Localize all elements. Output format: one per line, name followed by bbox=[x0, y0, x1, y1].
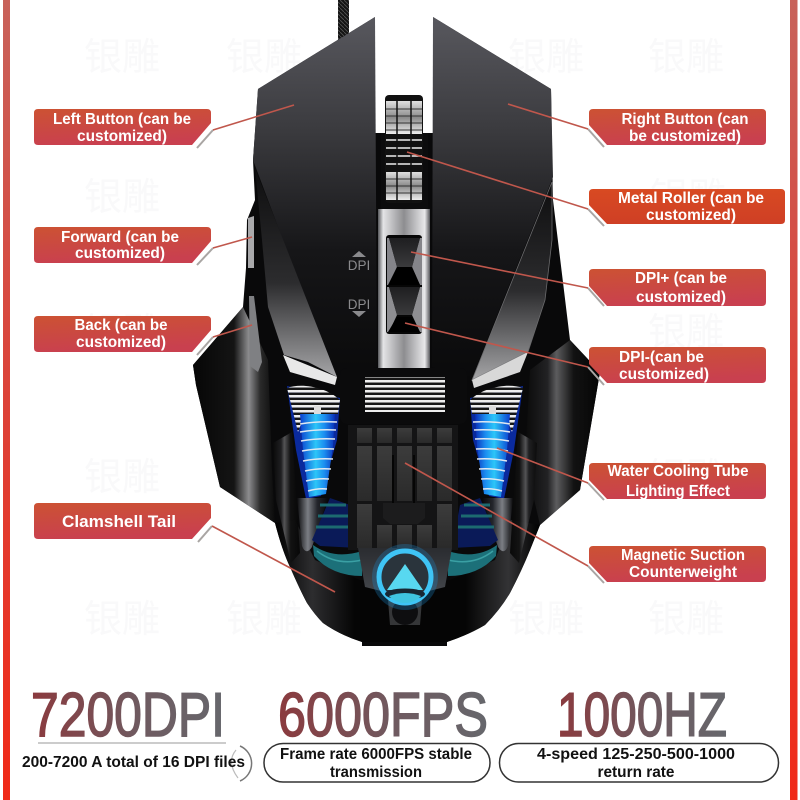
label: left button: customized) bbox=[77, 128, 167, 145]
label: forward: Forward (can be bbox=[61, 229, 179, 246]
pill: return rate bbox=[500, 744, 778, 782]
right cooling tube bbox=[448, 386, 537, 576]
centre block bbox=[340, 368, 467, 424]
ribbed chrome bbox=[365, 377, 445, 412]
stat: 7200DPI: 7200DPI bbox=[31, 681, 225, 750]
dpi up marking: DPI bbox=[348, 258, 370, 273]
mouse illustration bbox=[193, 0, 600, 646]
watermarks: 银雕 bbox=[84, 599, 160, 641]
metal roller bbox=[385, 95, 423, 203]
label: metal roller bbox=[589, 189, 785, 224]
wheel housing bbox=[381, 133, 428, 209]
label: water cooling tube: Lighting Effect bbox=[626, 483, 730, 500]
left silver facet bbox=[255, 168, 337, 377]
label: magnetic counterweight: Counterweight bbox=[629, 564, 737, 581]
watermarks: 银雕 bbox=[648, 599, 724, 641]
label: dpi plus bbox=[589, 269, 766, 306]
label: forward: customized) bbox=[75, 245, 165, 262]
label: left button bbox=[34, 109, 211, 145]
leader: clamshell tail bbox=[198, 526, 335, 592]
label: back: Back (can be bbox=[74, 317, 168, 334]
label: back bbox=[34, 316, 211, 352]
leader: forward bbox=[197, 237, 252, 265]
dpi up marking bbox=[348, 251, 370, 273]
counterweight tray bbox=[348, 425, 458, 550]
label: forward bbox=[34, 227, 211, 263]
dpi buttons bbox=[386, 235, 422, 334]
stat: 1000HZ: 1000HZ bbox=[557, 681, 727, 750]
leader: dpi minus bbox=[405, 323, 604, 385]
chrome plate bbox=[378, 209, 430, 372]
label: dpi plus: customized) bbox=[636, 289, 726, 306]
leader: left button bbox=[197, 105, 294, 148]
label: water cooling tube bbox=[589, 463, 766, 500]
pill: frame rate: Frame rate 6000FPS stable bbox=[280, 746, 472, 763]
label: dpi minus bbox=[589, 347, 766, 383]
left chrome accent bbox=[283, 355, 337, 385]
watermarks: 银雕 bbox=[648, 457, 724, 499]
watermarks: 银雕 bbox=[84, 37, 160, 79]
back button bbox=[249, 296, 262, 372]
right wing bbox=[525, 340, 600, 525]
right silver facet bbox=[472, 182, 552, 380]
pill: frame rate bbox=[264, 744, 490, 782]
label: water cooling tube: Water Cooling Tube bbox=[608, 463, 749, 480]
left wing bbox=[193, 307, 275, 523]
leader: metal roller bbox=[407, 152, 604, 226]
watermarks: 银雕 bbox=[226, 37, 302, 79]
label: dpi plus: DPI+ (can be bbox=[635, 270, 727, 287]
watermarks: 银雕 bbox=[226, 599, 302, 641]
right chrome accent bbox=[472, 352, 528, 388]
stat: 6000FPS: 6000FPS bbox=[278, 681, 488, 750]
left red border bbox=[3, 0, 10, 800]
label: right button: Right Button (can bbox=[622, 111, 748, 128]
leader: back bbox=[197, 325, 252, 355]
pill: dpi files: 200-7200 A total of 16 DPI files bbox=[22, 754, 245, 771]
label: metal roller: customized) bbox=[646, 207, 736, 224]
watermarks: 银雕 bbox=[84, 312, 160, 354]
rear dimple bbox=[392, 599, 418, 625]
watermarks: 银雕 bbox=[84, 457, 160, 499]
glowing logo bbox=[372, 544, 438, 610]
label: magnetic counterweight: Magnetic Suction bbox=[621, 547, 745, 564]
mouse body silhouette bbox=[193, 17, 600, 646]
label: left button: Left Button (can be bbox=[53, 111, 191, 128]
label: magnetic counterweight bbox=[589, 546, 766, 582]
forward button bbox=[248, 216, 254, 268]
left button bbox=[253, 17, 377, 377]
watermarks bbox=[84, 37, 726, 641]
label: clamshell tail bbox=[34, 503, 211, 539]
pill: frame rate: transmission bbox=[330, 764, 422, 781]
dpi down marking: DPI bbox=[348, 297, 370, 312]
label: clamshell tail: Clamshell Tail bbox=[62, 512, 176, 531]
right button bbox=[432, 17, 553, 377]
watermarks: 银雕 bbox=[84, 177, 160, 219]
cable bbox=[338, 0, 349, 40]
rear notch bbox=[388, 600, 422, 625]
leader: magnetic counterweight bbox=[405, 463, 604, 583]
leader: right button bbox=[508, 104, 604, 147]
label: metal roller: Metal Roller (can be bbox=[618, 190, 764, 207]
watermarks: 银雕 bbox=[508, 599, 584, 641]
pill: return rate: return rate bbox=[598, 764, 675, 781]
label: dpi minus: customized) bbox=[619, 366, 709, 383]
pill: return rate: 4-speed 125-250-500-1000 bbox=[537, 746, 735, 763]
leader: water cooling tube bbox=[497, 448, 604, 500]
watermarks: 银雕 bbox=[508, 37, 584, 79]
right red border bbox=[790, 0, 798, 800]
tail shell bbox=[275, 520, 540, 642]
label: right button: be customized) bbox=[629, 128, 741, 145]
pill: dpi files bbox=[22, 743, 252, 781]
watermarks: 银雕 bbox=[648, 312, 724, 354]
left cooling tube bbox=[273, 386, 362, 576]
logo plate bbox=[358, 548, 452, 597]
leader: dpi plus bbox=[411, 252, 604, 306]
watermarks: 银雕 bbox=[648, 37, 724, 79]
label: dpi minus: DPI-(can be bbox=[619, 349, 704, 366]
label: right button bbox=[589, 109, 766, 145]
label: back: customized) bbox=[76, 334, 166, 351]
watermarks: 银雕 bbox=[650, 177, 726, 219]
